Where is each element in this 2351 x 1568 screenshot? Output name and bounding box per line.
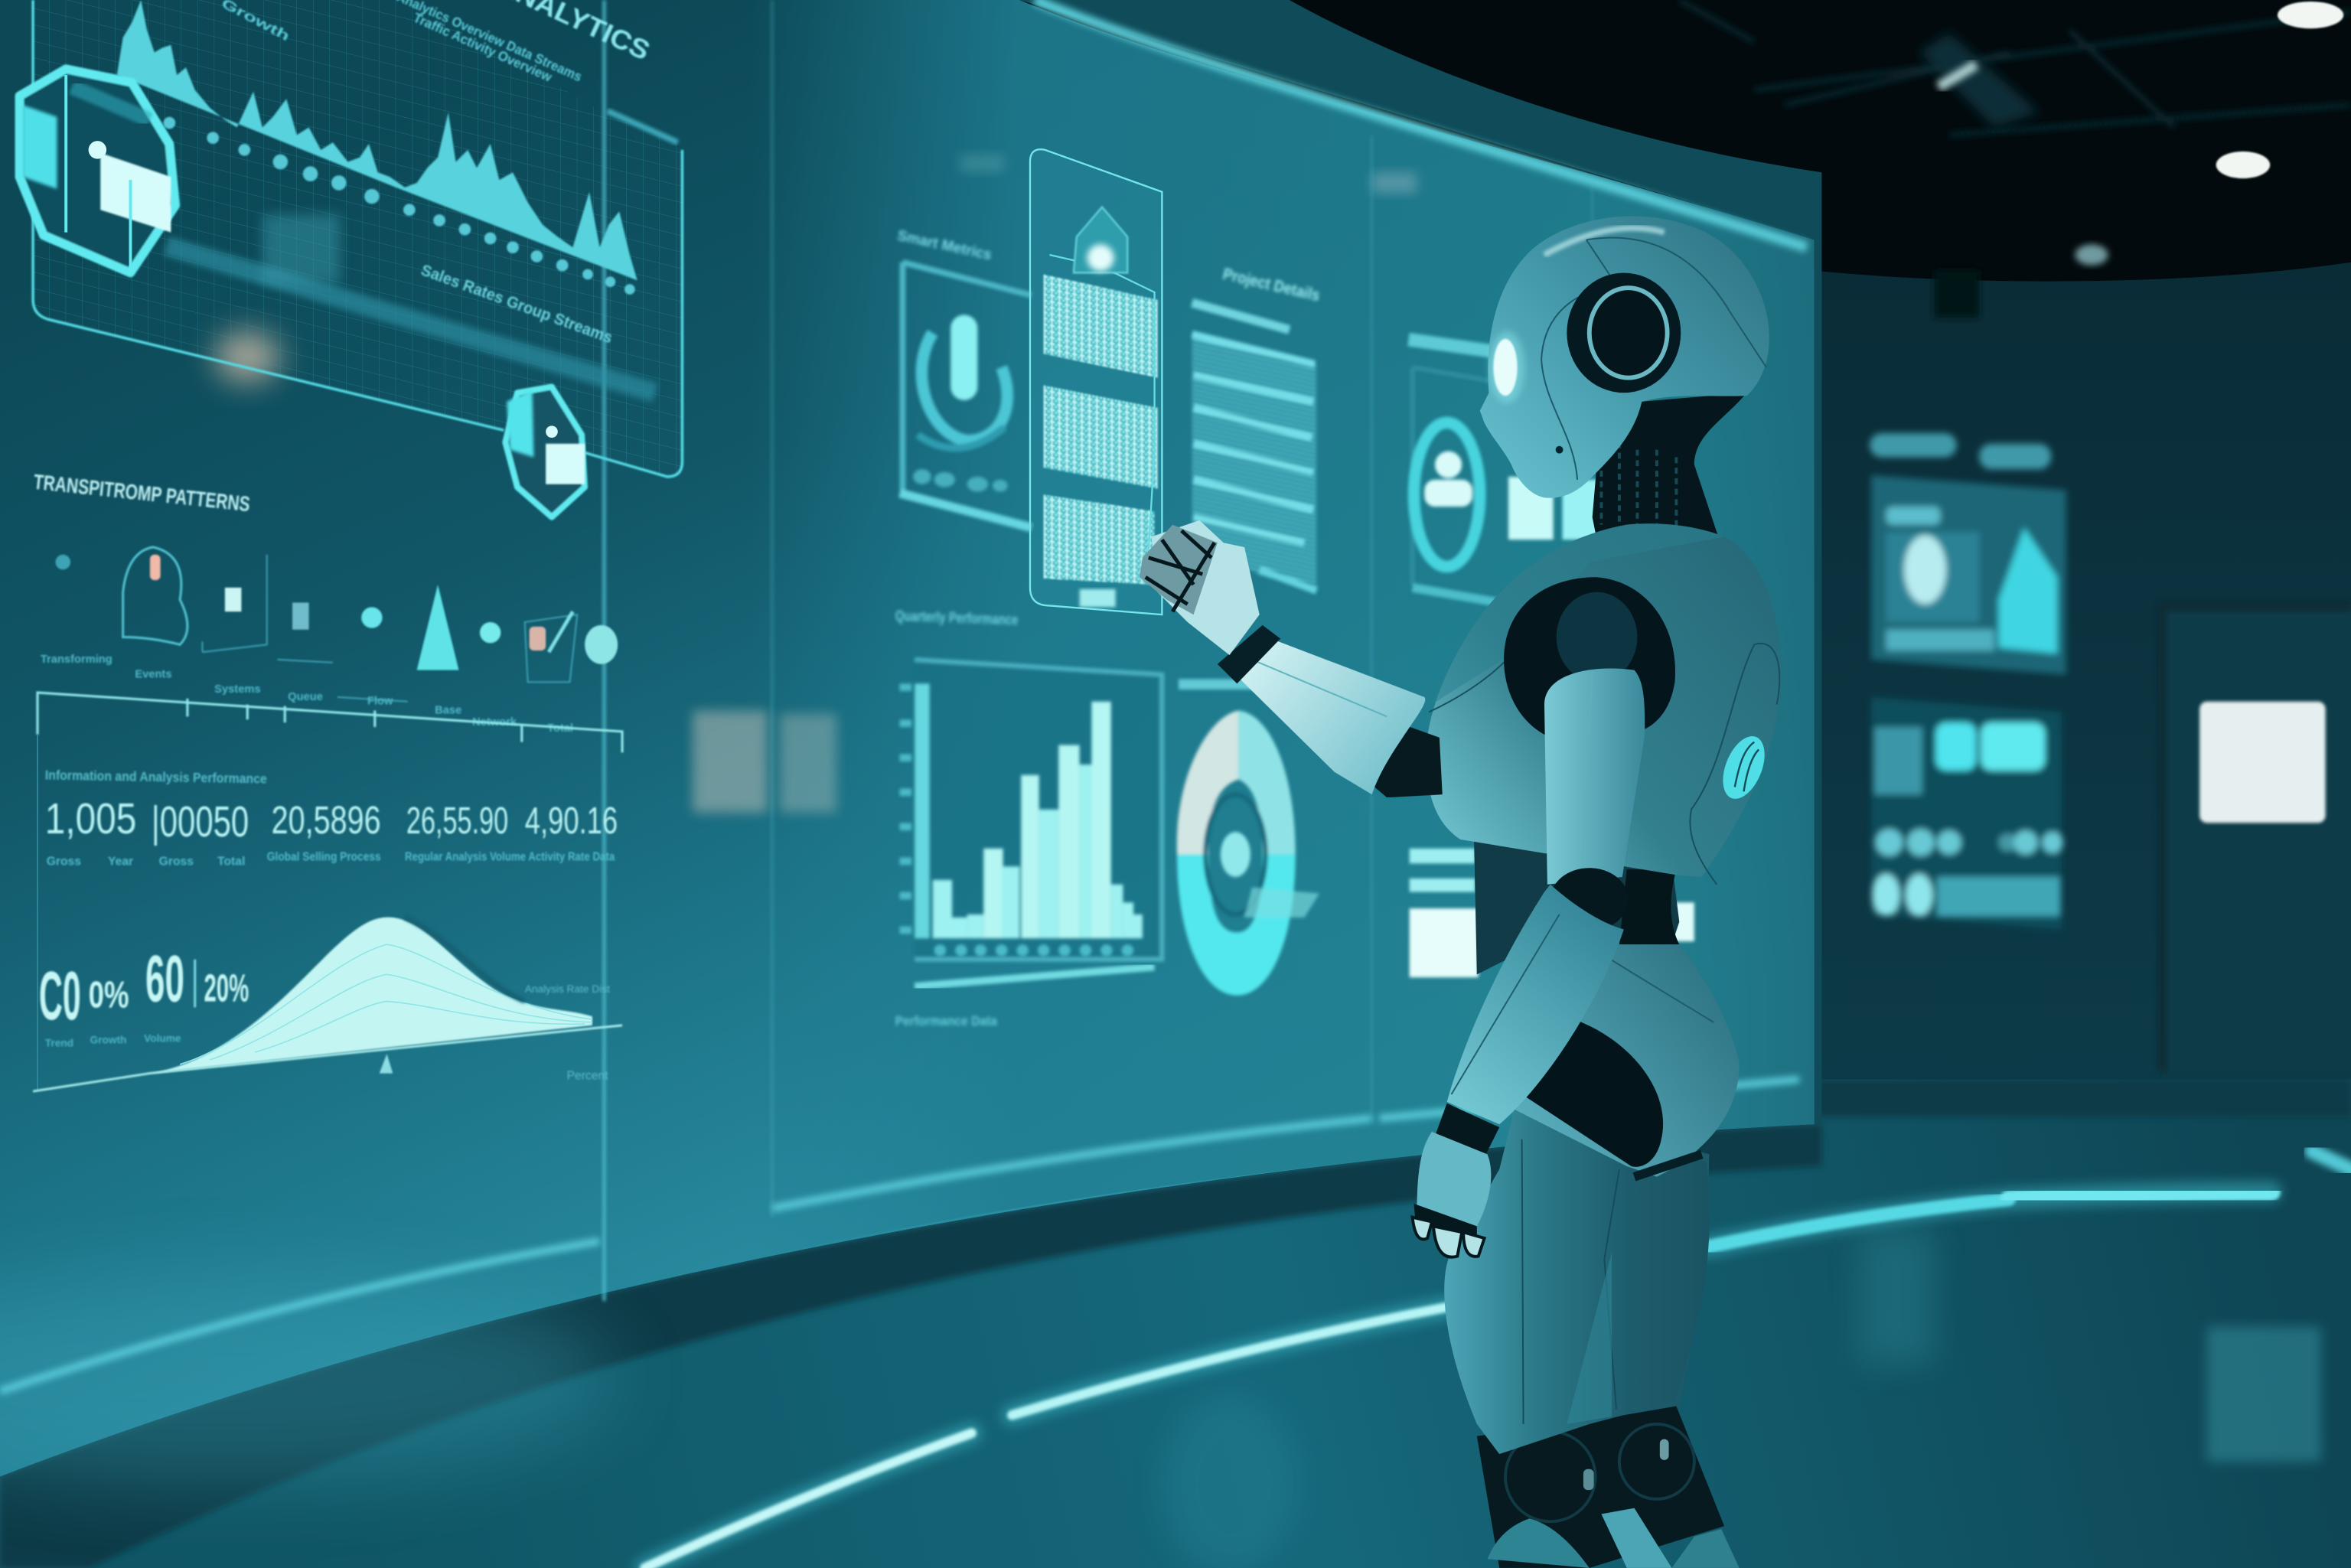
statistics row [45, 795, 618, 846]
bottom light strip [0, 1079, 1799, 1391]
panel: floating tablet [1030, 149, 1162, 614]
percentage stats: C0 [39, 957, 81, 1035]
percentage stats [39, 943, 249, 1035]
icon labels: Base [435, 704, 461, 716]
icon labels: Network [472, 716, 517, 729]
panel: bar chart: Performance Data [895, 1013, 997, 1028]
clover ring icon [1414, 422, 1480, 566]
panel: transforming patterns: Trend [45, 1037, 73, 1048]
right wall panels [1870, 433, 2066, 930]
subheading: Information and Analysis Performance [45, 768, 267, 787]
panel heading pills [1870, 433, 2051, 469]
panel: bar chart [895, 608, 1162, 1028]
statistics row: 1,005 [45, 795, 136, 843]
area chart [117, 0, 637, 280]
bell curve chart: Percent [567, 1069, 608, 1082]
donut chart [1177, 679, 1319, 996]
bars [915, 683, 1143, 938]
head [1480, 217, 1769, 498]
wrist band [1218, 625, 1280, 683]
panel: text list [1192, 265, 1322, 594]
statistics row: |00050 [152, 798, 249, 846]
curved screen wall [0, 0, 1821, 1484]
icon row [55, 547, 618, 702]
percentage stats: 0% [89, 974, 129, 1015]
panel: transforming patterns: Year [108, 855, 133, 868]
door [2162, 607, 2351, 1079]
panel: bar chart: Quarterly Performance [895, 608, 1019, 629]
shins [1488, 1518, 1590, 1568]
heading: TRANSPITROMP PATTERNS [32, 470, 251, 516]
icon labels: Total [547, 722, 573, 735]
tablet emblem [1074, 207, 1127, 273]
icon labels: Events [135, 668, 172, 680]
hips [1499, 930, 1740, 1177]
caption: Sales Rates Group Streams [419, 261, 615, 347]
icon labels: Queue [288, 691, 323, 703]
power icon [918, 315, 1007, 448]
forearm [1447, 885, 1624, 1124]
lowered hand [1413, 1132, 1491, 1257]
panel: transforming patterns: Regular Analysis Volume Activity Rate Data [405, 850, 615, 863]
floor light strips [644, 1151, 2351, 1568]
curb below curved wall [0, 1124, 1821, 1568]
panel: transforming patterns [32, 470, 622, 1091]
panel: transforming patterns: Growth [90, 1034, 127, 1045]
hexagon icon large [19, 69, 175, 273]
ceiling lights [1919, 2, 2343, 266]
eye [1489, 331, 1524, 403]
lower right panel [1871, 697, 2063, 930]
percentage stats: 20% [204, 967, 249, 1010]
robot [1140, 217, 1782, 1568]
elbow [1550, 868, 1629, 931]
hexagon icon small [505, 386, 585, 517]
panel: power icon card [896, 227, 1032, 528]
right leg rear [1590, 1124, 1709, 1446]
icon labels [41, 654, 573, 735]
white window [2199, 702, 2326, 823]
statistics row: 20,5896 [272, 798, 381, 842]
neck [1593, 393, 1746, 552]
waist [1474, 832, 1679, 974]
panel: transforming patterns: Gross [159, 855, 194, 868]
statistics row: 26,55.90 [406, 800, 508, 842]
subheading lines [219, 0, 585, 85]
upper arm [1544, 669, 1645, 885]
chest emblem [1715, 730, 1772, 805]
ear disc [1567, 273, 1681, 393]
shoulder socket [1504, 577, 1675, 735]
warm reflections [214, 331, 280, 383]
upper right panel [1871, 475, 2066, 675]
icon labels: Flow [367, 696, 393, 708]
panel: transforming patterns: Global Selling Process [267, 850, 381, 863]
extended arm [1140, 520, 1443, 797]
panel: transforming patterns: Gross [47, 855, 81, 868]
pointing hand [1140, 520, 1260, 655]
panel: power icon card: Smart Metrics [896, 227, 993, 263]
panel: clover card behind robot head [1407, 333, 1694, 977]
torso [1426, 523, 1782, 885]
bell curve chart [33, 918, 622, 1091]
axis rule [37, 693, 622, 752]
icon labels: Systems [214, 683, 261, 696]
bell curve chart: Analysis Rate Dist [525, 983, 610, 995]
statistics row: 4,90.16 [525, 800, 618, 842]
wrist [1435, 1103, 1499, 1157]
tablet circuit blocks [1044, 274, 1157, 585]
panel: text list: Project Details [1221, 265, 1322, 305]
chart axis labels [164, 117, 635, 295]
thigh front [1444, 1110, 1710, 1454]
seams [605, 0, 1593, 1301]
panel: top-left analytics chart [19, 0, 682, 517]
subheading lines: Traffic Activity Overview [411, 10, 555, 85]
back wall right [1807, 262, 2351, 1094]
icon labels: Transforming [41, 654, 112, 666]
percentage stats: 60 [145, 943, 184, 1016]
panel: transforming patterns: Volume [144, 1032, 181, 1044]
knees [1477, 1406, 1724, 1568]
top light strip [1035, 0, 1807, 247]
panel: transforming patterns: Total [217, 855, 245, 868]
floor [0, 1079, 2351, 1568]
